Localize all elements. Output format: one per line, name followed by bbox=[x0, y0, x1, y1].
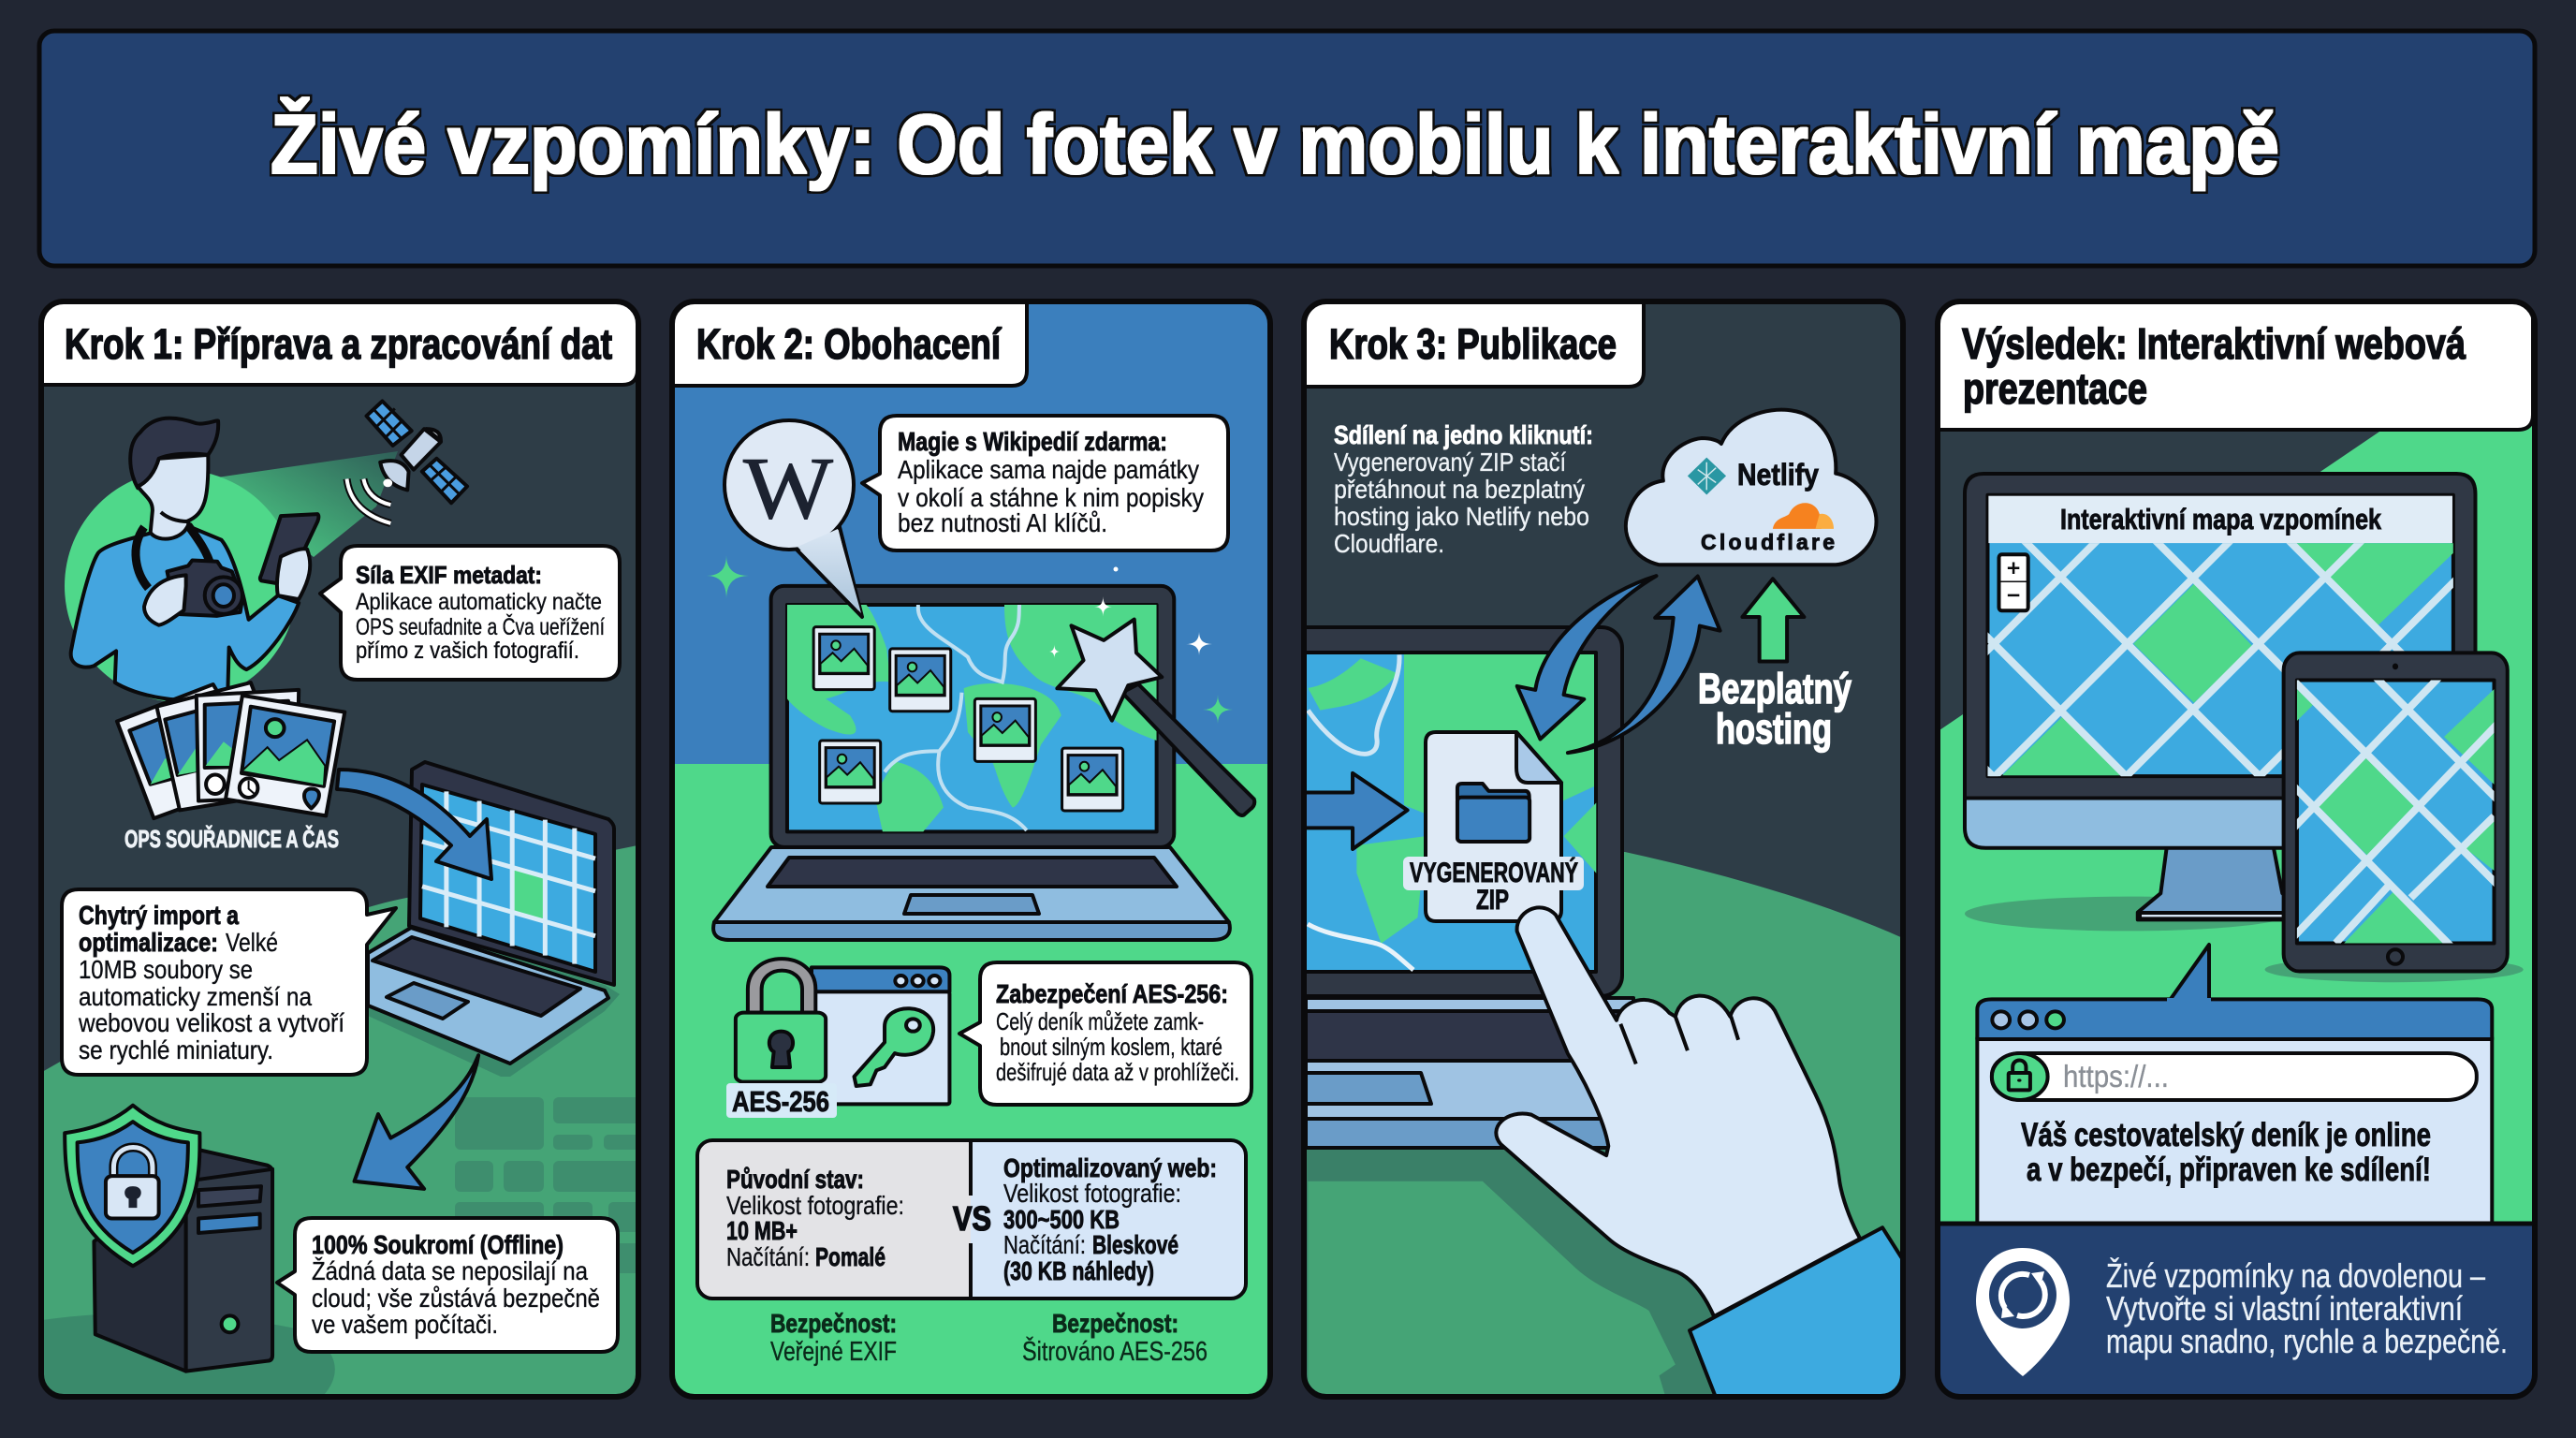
callout: smart import bbox=[62, 889, 396, 1075]
icon: location pin with refresh bbox=[1976, 1248, 2070, 1376]
browser window: a v bezpečí, připraven ke sdílení! bbox=[2027, 1152, 2431, 1188]
text: one click sharing: přetáhnout na bezplatný bbox=[1334, 475, 1585, 504]
callout: AES-256 security bbox=[959, 962, 1251, 1105]
comparison table: Pomalé bbox=[815, 1242, 886, 1271]
callout: full offline privacy bbox=[277, 1218, 618, 1352]
arrow: into ZIP bbox=[1295, 773, 1408, 849]
icon: laptop with map bbox=[1273, 627, 1633, 1148]
callout: Wikipedia magic: v okolí a stáhne k nim popisky bbox=[898, 483, 1204, 512]
title banner bbox=[39, 31, 2535, 266]
icon: ZIP file: ZIP bbox=[1476, 885, 1509, 916]
arrow: cloud to file bbox=[1517, 576, 1656, 740]
callout: EXIF metadata: Síla EXIF metadat: bbox=[356, 561, 542, 589]
icon: Wikipedia bubble: W bbox=[743, 440, 833, 537]
comparison table: Původní stav: bbox=[726, 1165, 864, 1194]
label: GPS coordinates and time: OPS SOUŘADNICE A ČAS bbox=[124, 825, 339, 853]
panel: step 3 publication bbox=[1273, 301, 1905, 1398]
callout: smart import: 10MB soubory se bbox=[79, 955, 253, 984]
icon: ZIP file bbox=[1403, 732, 1584, 921]
arrow: laptop to offline computer bbox=[355, 1055, 478, 1189]
icon: cloud with Netlify and Cloudflare: Cloudflare bbox=[1701, 530, 1835, 554]
panel: step 2 enrichment bbox=[672, 301, 1270, 1397]
comparison table: Velikost fotografie: bbox=[726, 1191, 904, 1220]
security comparison text: Veřejné EXIF bbox=[770, 1337, 897, 1367]
arrow: green up bbox=[1742, 579, 1804, 661]
icon: stack of photos bbox=[117, 682, 344, 818]
callout: AES-256 security: bnout silným koslem, ktaré bbox=[1000, 1033, 1222, 1061]
arrow: file to cloud bbox=[1568, 577, 1720, 753]
callout: full offline privacy: 100% Soukromí (Offline) bbox=[312, 1230, 564, 1259]
browser window: https://... bbox=[2063, 1059, 2169, 1093]
callout: smart import: automaticky zmenší na bbox=[79, 982, 312, 1011]
comparison table: Velikost fotografie: bbox=[1003, 1179, 1181, 1208]
callout: smart import: Velké bbox=[226, 928, 278, 957]
header: step 2 bbox=[673, 301, 1027, 386]
text: free hosting: Bezplatný bbox=[1698, 665, 1852, 712]
callout: EXIF metadata: OPS seufadnite a Čva ueřížení bbox=[356, 613, 605, 640]
icon: laptop with photo grid bbox=[368, 762, 620, 1077]
text: free hosting bbox=[1698, 665, 1852, 753]
callout: full offline privacy: ve vašem počítači. bbox=[312, 1310, 498, 1339]
callout: smart import: webovou velikost a vytvoří bbox=[78, 1008, 344, 1037]
icon: computer tower bbox=[94, 1151, 272, 1372]
callout: smart import: optimalizace: bbox=[79, 928, 218, 957]
header: result: Výsledek: Interaktivní webová bbox=[1962, 319, 2466, 368]
security comparison text: Šitrováno AES-256 bbox=[1022, 1335, 1208, 1367]
comparison table: Načítání: bbox=[726, 1242, 810, 1271]
text: free hosting: hosting bbox=[1716, 705, 1832, 753]
comparison table: Načítání: bbox=[1003, 1230, 1086, 1259]
comparison table: 10 MB+ bbox=[726, 1216, 798, 1245]
comparison table: 300~500 KB bbox=[1003, 1205, 1120, 1234]
icon: sparkles bbox=[707, 555, 1233, 724]
comparison table bbox=[697, 1140, 1246, 1299]
browser window: Váš cestovatelský deník je online bbox=[2021, 1117, 2431, 1153]
text: map title: Interaktivní mapa vzpomínek bbox=[2060, 503, 2382, 536]
icon: cloud with Netlify and Cloudflare: Netlify bbox=[1737, 458, 1819, 492]
header: step 2: Krok 2: Obohacení bbox=[696, 320, 1002, 368]
callout: Wikipedia magic: Magie s Wikipedií zdarma: bbox=[898, 427, 1167, 456]
comparison table: (30 KB náhledy) bbox=[1003, 1256, 1154, 1285]
callout: smart import: se rychlé miniatury. bbox=[79, 1035, 273, 1064]
callout: Wikipedia magic bbox=[862, 416, 1228, 550]
callout: AES-256 security: Celý deník můžete zamk- bbox=[996, 1007, 1204, 1035]
text: one click sharing: Cloudflare. bbox=[1334, 529, 1444, 558]
comparison table: Bleskové bbox=[1092, 1230, 1178, 1259]
icon: magic wand bbox=[1049, 596, 1254, 815]
header: step 1: Krok 1: Příprava a zpracování dat bbox=[65, 320, 612, 368]
icon: person with camera and phone bbox=[65, 418, 398, 702]
text: one click sharing: Vygenerovaný ZIP stačí bbox=[1334, 448, 1566, 477]
callout: Wikipedia magic: Aplikace sama najde památky bbox=[898, 455, 1199, 484]
icon: shield with padlock bbox=[65, 1106, 199, 1266]
comparison table: Optimalizovaný web: bbox=[1003, 1153, 1217, 1182]
text: one click sharing: Sdílení na jedno kliknutí: bbox=[1334, 420, 1593, 449]
icon: padlock, browser and key bbox=[726, 959, 949, 1118]
security comparison text: Bezpečnost: bbox=[1052, 1309, 1178, 1338]
icon: tablet with map bbox=[2265, 653, 2524, 982]
header: result bbox=[1939, 301, 2533, 430]
header: result: prezentace bbox=[1963, 364, 2147, 413]
callout: AES-256 security: dešifrujé data až v prohlížeči. bbox=[996, 1058, 1239, 1086]
security comparison text: Bezpečnost: bbox=[770, 1309, 897, 1338]
icon: satellite bbox=[347, 402, 467, 523]
footer banner: Vytvořte si vlastní interaktivní bbox=[2106, 1289, 2463, 1328]
header: step 3: Krok 3: Publikace bbox=[1329, 320, 1617, 368]
panel: result bbox=[1560, 301, 2576, 1397]
icon: laptop with map and photos bbox=[713, 586, 1230, 940]
footer banner bbox=[1939, 1224, 2533, 1396]
callout: full offline privacy: Žádná data se neposilají na bbox=[312, 1256, 588, 1285]
icon: cloud with Netlify and Cloudflare bbox=[1626, 410, 1877, 565]
title banner: Živé vzpomínky: Od fotek v mobilu k interaktivní mapě bbox=[271, 96, 2279, 192]
icon: Wikipedia bubble bbox=[724, 420, 862, 617]
arrow: photos to laptop bbox=[337, 770, 491, 879]
footer banner: Živé vzpomínky na dovolenou – bbox=[2106, 1256, 2485, 1295]
panel: step 1 preparation bbox=[41, 301, 642, 1397]
browser window bbox=[1977, 945, 2492, 1231]
callout: full offline privacy: cloud; vše zůstává bezpečně bbox=[312, 1284, 600, 1313]
header: step 1 bbox=[41, 301, 637, 385]
callout: EXIF metadata: Aplikace automaticky načte bbox=[356, 589, 602, 615]
comparison table: VS bbox=[953, 1199, 991, 1238]
text: one click sharing: hosting jako Netlify nebo bbox=[1334, 502, 1589, 531]
callout: EXIF metadata: přímo z vašich fotografií. bbox=[356, 638, 579, 664]
icon: pointing hand bbox=[1496, 907, 1905, 1398]
icon: padlock, browser and key: AES-256 bbox=[732, 1085, 829, 1118]
callout: smart import: Chytrý import a bbox=[79, 901, 239, 930]
text: one click sharing bbox=[1334, 420, 1593, 558]
callout: EXIF metadata bbox=[320, 546, 620, 680]
icon: ZIP file: VYGENEROVANÝ bbox=[1410, 857, 1578, 888]
callout: Wikipedia magic: bez nutnosti AI klíčů. bbox=[898, 508, 1107, 537]
security comparison text bbox=[770, 1309, 1208, 1367]
header: step 3 bbox=[1305, 301, 1644, 387]
callout: AES-256 security: Zabezpečení AES-256: bbox=[996, 979, 1228, 1008]
icon: desktop monitor with map bbox=[1560, 474, 2576, 936]
